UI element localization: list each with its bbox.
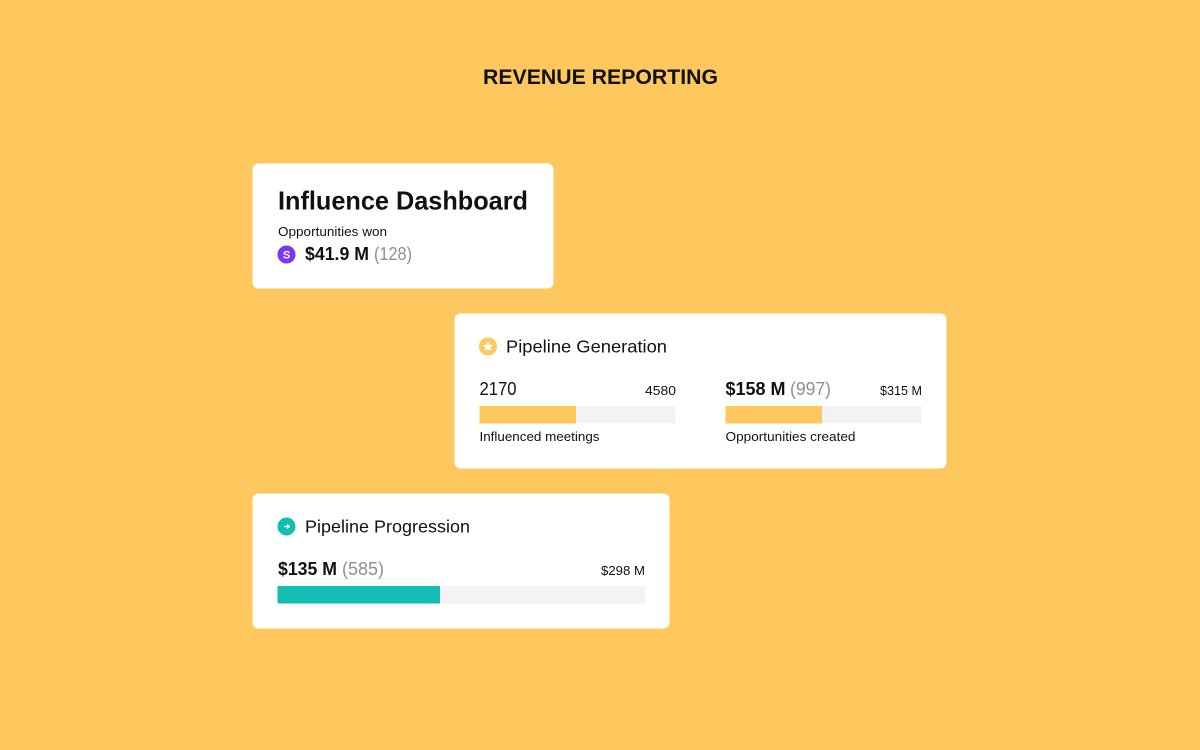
- value: $41.9 M (128): [305, 244, 412, 264]
- heading: Pipeline Generation: Pipeline Generation: [506, 336, 667, 356]
- label: Opportunities won: Opportunities won: [278, 224, 387, 239]
- progress bar: meetings: [480, 406, 676, 424]
- value: $135 M (585): $135 M: [278, 559, 337, 579]
- metric: $158 M opportunities created: Opportunities created: [726, 429, 856, 444]
- metric: $158 M opportunities created: $315 M: [880, 383, 922, 398]
- value: $41.9 M (128): (128): [374, 244, 412, 264]
- icon: purple dollar badge: S: [283, 250, 290, 262]
- icon: teal arrow badge: [278, 518, 296, 536]
- value: $135 M (585): [278, 559, 384, 579]
- label: $298 M: $298 M: [601, 563, 645, 578]
- progress bar: progression: [278, 586, 645, 604]
- title: REVENUE REPORTING: [483, 65, 718, 89]
- icon: purple dollar badge: [278, 246, 296, 264]
- panel: Influence Dashboard: [252, 164, 554, 288]
- metric: 2170 influenced meetings: 4580: [645, 383, 676, 398]
- icon: yellow star badge: [479, 338, 497, 356]
- metric: $158 M opportunities created: (997): [790, 379, 831, 399]
- metric: $158 M opportunities created: [726, 379, 922, 444]
- metric: 2170 influenced meetings: [480, 379, 676, 444]
- metric: 2170 influenced meetings: Influenced meetings: [480, 429, 600, 444]
- value: $41.9 M (128): $41.9 M: [305, 244, 369, 264]
- value: $135 M (585): (585): [342, 559, 384, 579]
- heading: Influence Dashboard: Influence Dashboard: [278, 186, 528, 216]
- progress bar: opportunities: [726, 406, 922, 424]
- metric: $158 M opportunities created: $158 M: [726, 379, 786, 399]
- heading: Pipeline Progression: Pipeline Progression: [305, 516, 470, 536]
- metric: 2170 influenced meetings: 2170: [480, 379, 516, 399]
- panel: Pipeline Generation: [454, 314, 946, 468]
- panel: Pipeline Progression: [252, 494, 670, 628]
